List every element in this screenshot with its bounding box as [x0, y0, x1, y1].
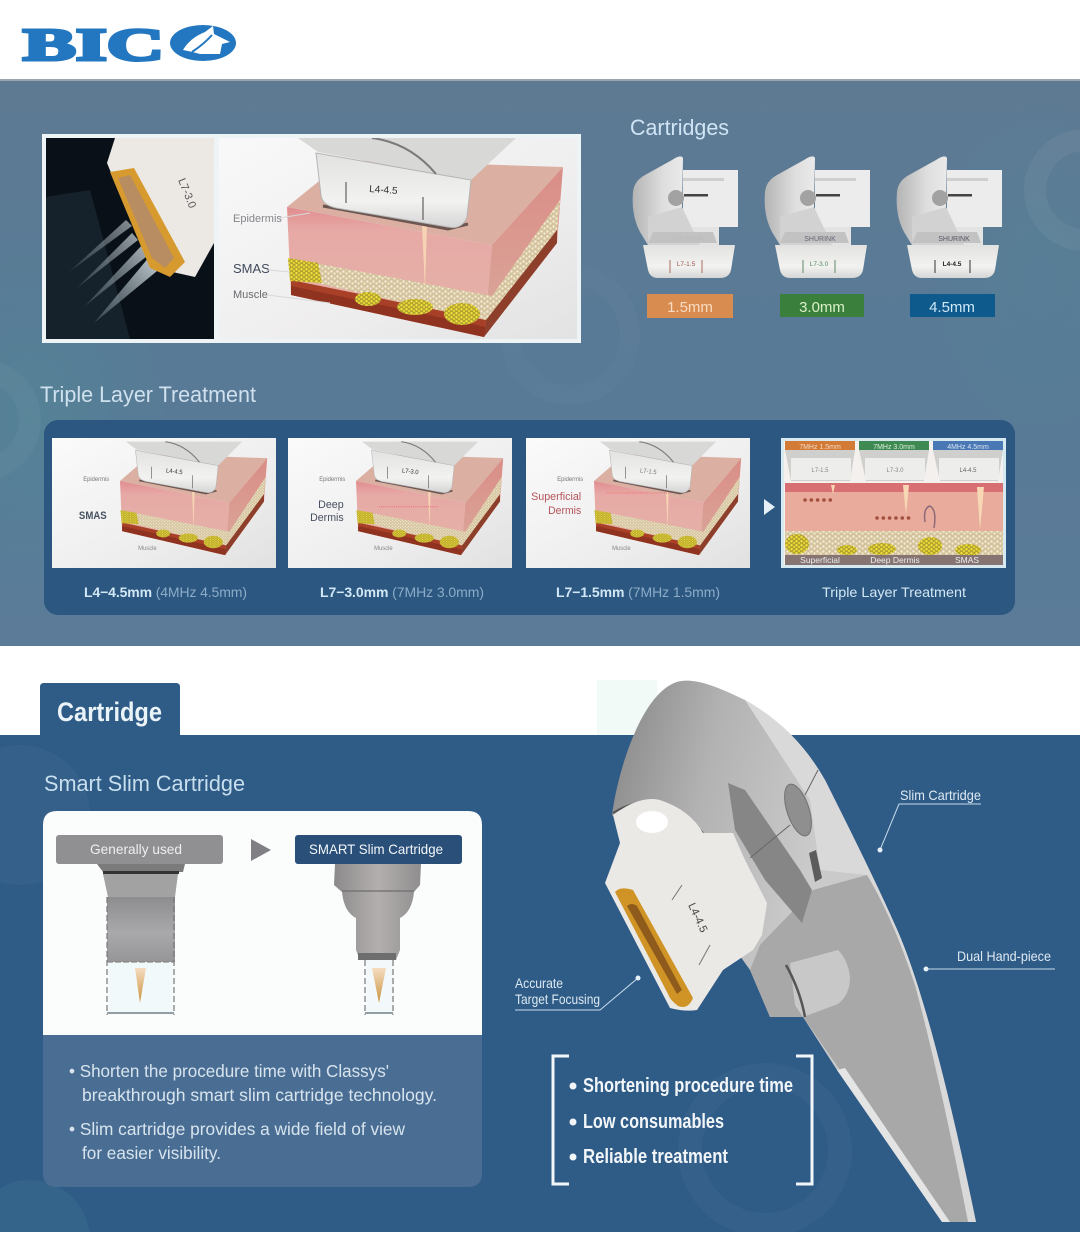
handpiece illustration [605, 681, 976, 1222]
photo: triple layer diagram [781, 438, 1006, 568]
cartridge 4.5mm [897, 156, 1002, 317]
right photo: skin block with cartridge: L4-4.5 [369, 184, 398, 197]
logo: BICO [23, 19, 236, 70]
knob [790, 950, 850, 1017]
cartridge 1.5mm: SHURINK [672, 236, 704, 243]
left photo: cartridge emitting beams: L7-3.0 [175, 177, 198, 210]
photo: triple layer diagram: L4-4.5 [959, 468, 977, 474]
right photo: skin block with cartridge [219, 138, 577, 339]
tab: Cartridge [40, 683, 180, 735]
callout: Dual Hand-piece: Dual Hand-piece [957, 948, 1051, 964]
photo: L7-3.0 deep dermis: Muscle [374, 546, 393, 552]
photo: L7-1.5 superficial dermis: Superficial [531, 491, 581, 503]
photo: L4-4.5 SMAS: L4-4.5 [166, 468, 183, 476]
badge [910, 294, 995, 317]
photo: L7-3.0 deep dermis: L7-3.0 [402, 468, 419, 476]
photo: L4-4.5 SMAS: Muscle [138, 546, 157, 552]
photo: L7-1.5 superficial dermis [526, 438, 750, 568]
bracketed benefits list: Low consumables [583, 1111, 724, 1133]
right photo: skin block with cartridge: Muscle [233, 289, 268, 301]
lower section band [0, 735, 1080, 1247]
caption: L4-4.5mm: L4−4.5mm (4MHz 4.5mm) [84, 584, 247, 600]
photo: triple layer diagram: SMAS [955, 555, 979, 565]
photo: L4-4.5 SMAS [52, 438, 276, 568]
left photo: cartridge emitting beams [46, 138, 214, 339]
callout: Accurate Target Focusing: Accurate [515, 975, 563, 991]
diagram: generally used cartridge [97, 864, 185, 1015]
caption: Triple Layer Treatment: Triple Layer Treatment [822, 584, 966, 600]
badge: Generally used [56, 835, 223, 864]
photo: L7-3.0 deep dermis: Epidermis [319, 477, 345, 483]
cartridge 3.0mm: L7-3.0 [810, 261, 829, 268]
text: slim cartridge benefits: • Slim cartridge provides a wide field of view [69, 1119, 405, 1139]
photo: triple layer diagram: L7-3.0 [886, 468, 904, 474]
text: slim cartridge benefits [69, 1061, 437, 1163]
cartridge 4.5mm: L4-4.5 [943, 261, 962, 268]
image panel: handpiece and skin diagram [42, 125, 590, 365]
badge: Generally used: Generally used [90, 841, 182, 857]
bracketed benefits list: Reliable treatment [583, 1146, 728, 1168]
cartridge 3.0mm: SHURINK [804, 236, 836, 243]
right photo: skin block with cartridge: SMAS [233, 261, 270, 276]
diagram: smart slim cartridge [334, 864, 421, 1015]
cartridge 4.5mm: SHURINK [938, 236, 970, 243]
photo: triple layer diagram: Deep Dermis [870, 555, 920, 565]
bracketed benefits list [553, 1056, 812, 1184]
badge: SMART Slim Cartridge [295, 835, 462, 864]
orange transducer slot [615, 888, 693, 1007]
callout: Dual Hand-piece [924, 948, 1055, 972]
photo: triple layer diagram: L7-1.5 [811, 468, 829, 474]
heading: Triple Layer Treatment: Triple Layer Treatment [40, 382, 256, 407]
badge [780, 294, 864, 317]
text: slim cartridge benefits: • Shorten the procedure time with Classys' [69, 1061, 389, 1081]
badge: SMART Slim Cartridge: SMART Slim Cartridge [309, 841, 443, 857]
badge: 3.0mm [799, 299, 845, 316]
callout: Accurate Target Focusing [515, 975, 640, 1010]
cartridge 3.0mm [765, 156, 870, 317]
handpiece illustration: L4-4.5 [685, 901, 709, 935]
cartridge 1.5mm: L7-1.5 [677, 261, 696, 268]
photo: L7-1.5 superficial dermis: Epidermis [557, 477, 583, 483]
photo: L7-3.0 deep dermis: Deep [318, 498, 344, 511]
bracketed benefits list: Shortening procedure time [583, 1075, 793, 1097]
right photo: skin block with cartridge: Epidermis [233, 213, 282, 225]
photo: L7-3.0 deep dermis [288, 438, 512, 568]
photo: triple layer diagram: 7MHz 3.0mm [873, 444, 915, 451]
badge [647, 294, 733, 318]
panel: triple layer treatment [44, 420, 1015, 615]
photo: triple layer diagram: 7MHz 1.5mm [799, 444, 841, 451]
arrow [764, 499, 775, 515]
photo: L7-3.0 deep dermis: Dermis [310, 512, 344, 524]
tab: Cartridge: Cartridge [57, 697, 162, 727]
photo: L7-1.5 superficial dermis: Dermis [548, 505, 582, 517]
caption: L7-3.0mm: L7−3.0mm (7MHz 3.0mm) [320, 584, 484, 600]
callout: Slim Cartridge [878, 787, 981, 852]
photo: L4-4.5 SMAS: SMAS [79, 510, 107, 522]
caption: L7-1.5mm: L7−1.5mm (7MHz 1.5mm) [556, 584, 720, 600]
photo: L7-1.5 superficial dermis: L7-1.5 [640, 468, 657, 476]
button [779, 781, 817, 839]
photo: triple layer diagram: Superficial [800, 555, 840, 565]
callout: Slim Cartridge: Slim Cartridge [900, 787, 981, 803]
badge: 1.5mm [667, 299, 713, 316]
callout: Accurate Target Focusing: Target Focusing [515, 991, 600, 1007]
white cartridge tip [605, 799, 767, 1011]
heading: Smart Slim Cartridge: Smart Slim Cartridge [44, 771, 245, 796]
top section band [0, 79, 1080, 646]
arrow [251, 839, 271, 861]
faint tinted corner behind handpiece [597, 680, 657, 735]
text: slim cartridge benefits: breakthrough smart slim cartridge technology. [82, 1085, 437, 1105]
text: slim cartridge benefits: for easier visibility. [82, 1143, 221, 1163]
photo: L4-4.5 SMAS: Epidermis [83, 477, 109, 483]
photo: L7-1.5 superficial dermis: Muscle [612, 546, 631, 552]
heading: Cartridges: Cartridges [630, 115, 729, 140]
cartridge 1.5mm [633, 156, 738, 318]
photo: triple layer diagram: 4MHz 4.5mm [947, 444, 989, 451]
badge: 4.5mm [929, 299, 975, 316]
panel: slim cartridge comparison [43, 811, 482, 1187]
logo: BICO: BIC [23, 19, 164, 70]
